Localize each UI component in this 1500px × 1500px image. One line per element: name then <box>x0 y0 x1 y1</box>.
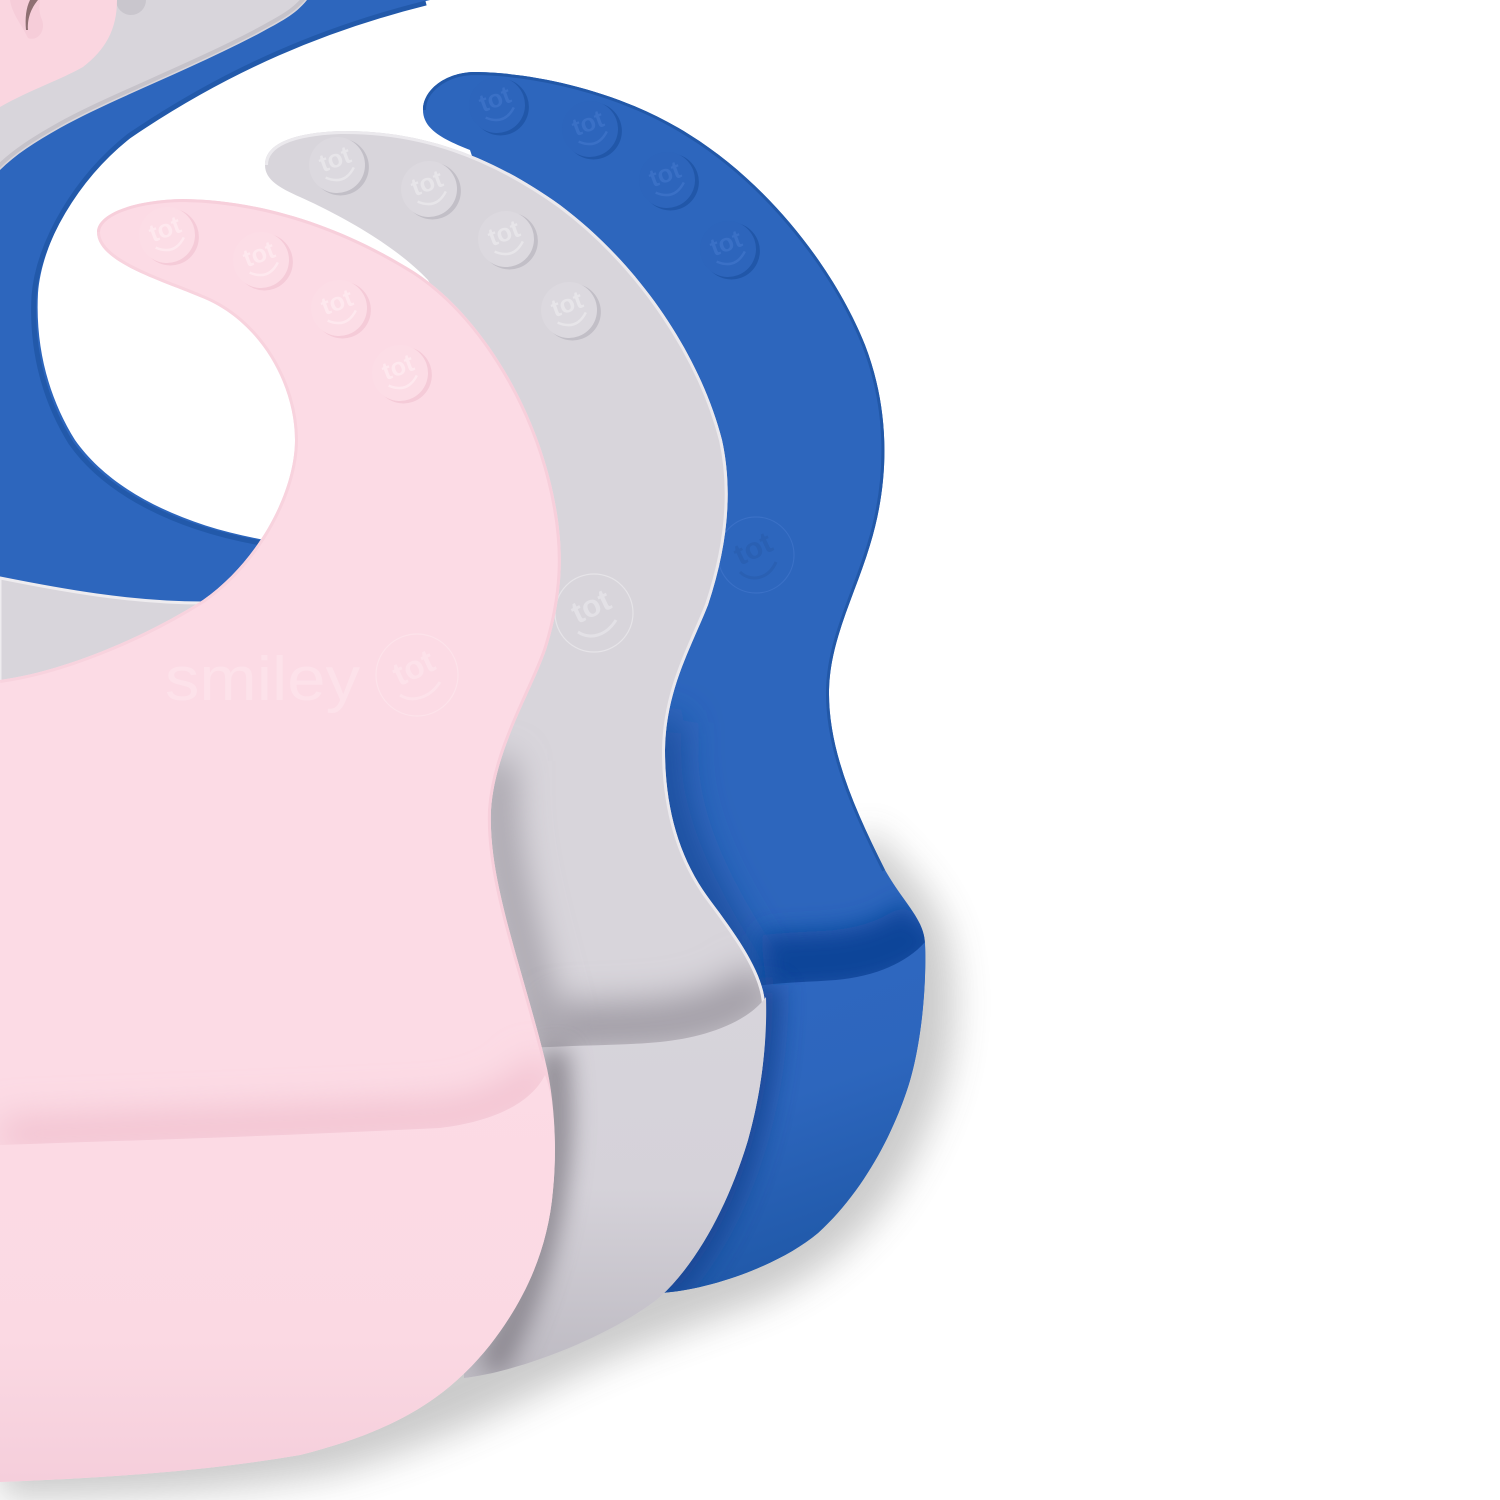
blue button 4 <box>692 212 768 288</box>
pink button 3: tot <box>317 284 357 321</box>
gray pocket <box>450 997 766 1378</box>
photo: three silicone bibs <box>0 0 971 1500</box>
blue pocket <box>640 942 925 1293</box>
pink button 3 <box>303 271 379 347</box>
pink pocket <box>0 1075 555 1482</box>
blue button 1 <box>461 68 537 144</box>
pink embossed smiley tot logo: tot <box>386 642 440 693</box>
back bib: pink strap with keyhole at top left <box>0 0 117 107</box>
gray button 1 <box>301 128 377 204</box>
gray pocket shade <box>490 1050 556 1370</box>
blue neck buttons <box>461 68 768 288</box>
pink button 2: tot <box>239 236 279 273</box>
blue embossed logo: tot <box>729 526 778 572</box>
blue button 3: tot <box>645 156 685 193</box>
pink embossed smiley tot logo <box>165 634 458 716</box>
gray button 4 <box>533 273 609 349</box>
blue bib <box>423 68 925 1293</box>
pink button 1 <box>131 198 207 274</box>
gray neck buttons <box>301 128 609 349</box>
pink button 4 <box>364 336 440 412</box>
pink button 1: tot <box>145 211 185 248</box>
pink neck buttons <box>131 198 440 412</box>
pink embossed smiley tot logo: smiley <box>165 645 360 714</box>
blue embossed logo <box>718 517 794 593</box>
back bib: gray strap at top left <box>0 0 307 170</box>
pink bib <box>0 198 561 1482</box>
pink button 2 <box>225 223 301 299</box>
gray button 2: tot <box>407 165 447 202</box>
blue button 1: tot <box>475 81 515 118</box>
gray button 3 <box>470 202 546 278</box>
gray embossed logo: tot <box>565 582 616 630</box>
pink button 4: tot <box>378 349 418 386</box>
blue button 2 <box>554 92 630 168</box>
gray button 3: tot <box>484 215 524 252</box>
back bib: gray body at left <box>0 578 203 685</box>
cast shadow on white surface <box>0 830 955 1499</box>
gray button 2 <box>393 152 469 228</box>
gray button 1: tot <box>315 141 355 178</box>
blue pocket shade <box>660 985 764 1293</box>
gray bib <box>265 128 766 1378</box>
blue button 4: tot <box>706 225 746 262</box>
blue button 3 <box>631 143 707 219</box>
blue button 2: tot <box>568 105 608 142</box>
gray button 4: tot <box>547 286 587 323</box>
back bib: blue strap and body at top left <box>0 0 430 610</box>
gray embossed logo <box>555 574 633 652</box>
